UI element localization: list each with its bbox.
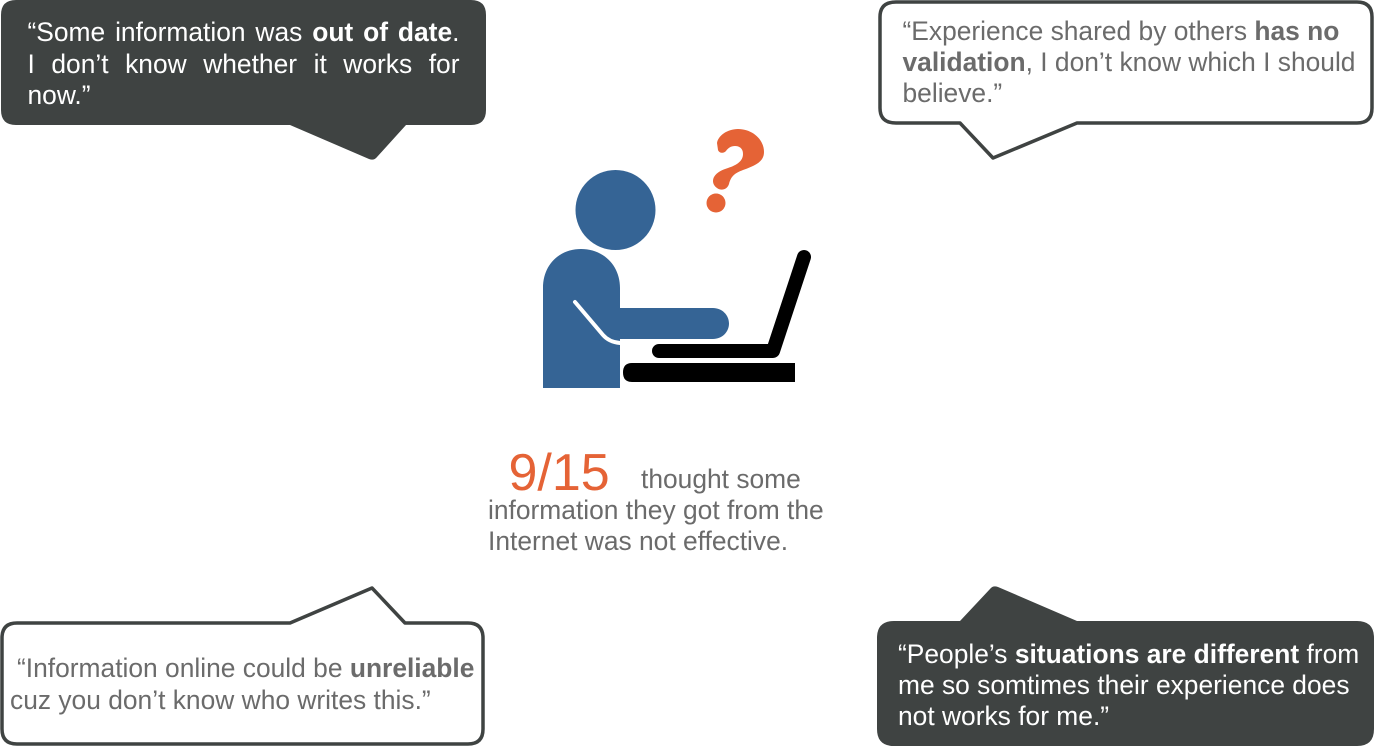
callout: out of date: whether (203, 48, 297, 78)
callout: out of date: works (343, 48, 412, 78)
callout: no validation: “Experience shared by others has no (902, 16, 1339, 46)
statistic text (488, 444, 824, 556)
callout: out of date: information (115, 17, 246, 47)
callout: out of date: don’t (51, 48, 109, 78)
callout: no validation (878, 0, 1374, 160)
icon: person (543, 170, 729, 388)
callout: unreliable (0, 586, 485, 746)
callout: out of date: it (314, 48, 327, 78)
callout: out of date: I (28, 48, 35, 78)
callout: situations are different: not works for me.” (898, 701, 1109, 731)
callout: out of date: date. (398, 17, 459, 47)
callout: out of date: know (125, 48, 187, 78)
callout: situations are different (877, 586, 1374, 746)
stat description: Internet was not effective. (488, 526, 788, 556)
callout: situations are different: “People’s situations are different from (898, 639, 1359, 669)
callout: out of date: now.” (28, 80, 91, 110)
callout: unreliable: cuz you don’t know who writes this.” (10, 685, 431, 715)
icon: question mark (706, 129, 764, 212)
callout: no validation: believe.” (902, 78, 1002, 108)
callout: situations are different: me so somtimes their experience does (898, 670, 1350, 700)
callout: out of date: for (429, 48, 459, 78)
callout: no validation: validation, I don’t know which I should (902, 47, 1355, 77)
callout: out of date: out (312, 17, 353, 47)
stat description (488, 464, 824, 556)
stat description: thought some (641, 464, 801, 494)
icon: laptop (623, 257, 804, 382)
stat number: 9/15 (508, 444, 610, 502)
callout: unreliable: “Information online could be unreliable (17, 653, 474, 683)
callout: out of date (1, 0, 486, 160)
callout: out of date: of (363, 17, 388, 47)
callout: out of date: “Some (28, 17, 105, 47)
illustration: person at laptop (543, 129, 811, 388)
callout: out of date: was (255, 17, 302, 47)
stat description: information they got from the (488, 495, 824, 525)
